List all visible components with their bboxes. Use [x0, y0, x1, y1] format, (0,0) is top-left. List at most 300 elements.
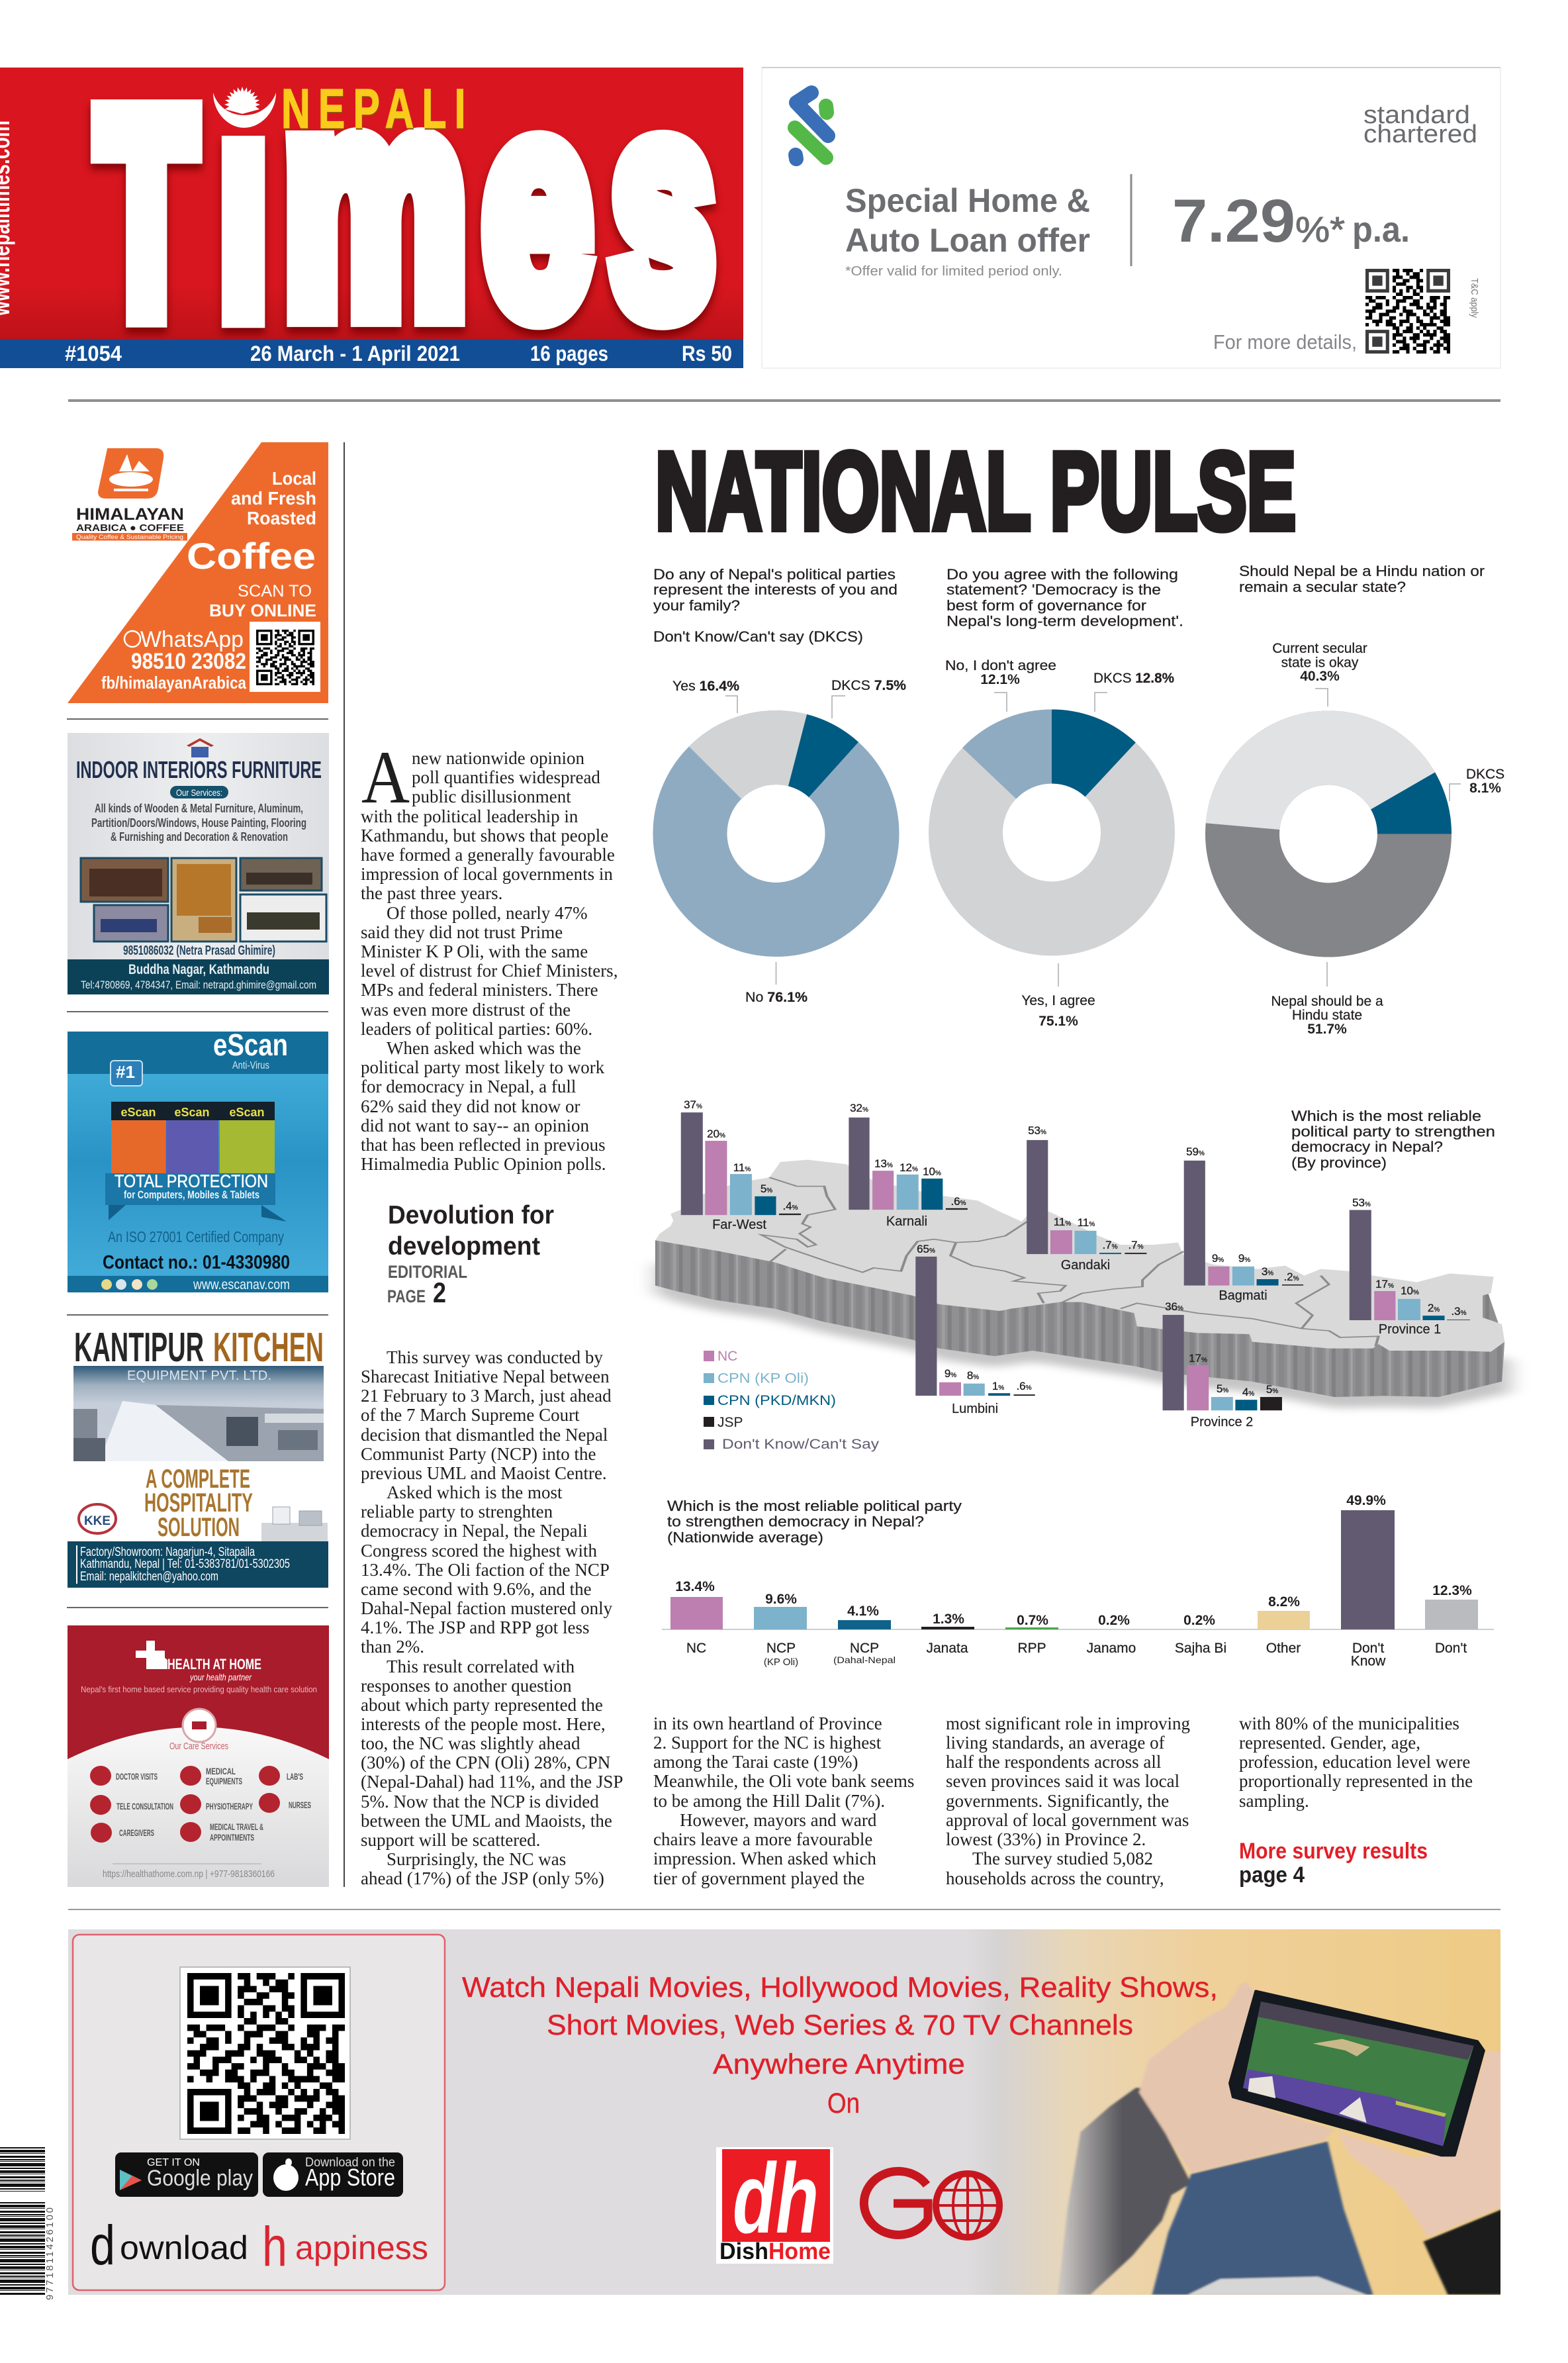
panel: nationwide bar chart	[662, 1493, 1494, 1668]
slogan: HOSPITALITY	[144, 1488, 253, 1518]
article: survey text column 2: However, mayors and ward	[680, 1810, 877, 1830]
labels: Yes 16.4%	[672, 679, 739, 694]
article: survey text column 1: (30%) of the CPN (Oli) 28%, CPN	[361, 1753, 610, 1772]
Bagmati bars: .2%	[1283, 1271, 1299, 1283]
logo word: Nepali: NEPALI	[281, 77, 474, 140]
address band: Buddha Nagar, Kathmandu	[128, 962, 269, 977]
article: intro text: level of distrust for Chief Ministers,	[361, 961, 618, 981]
article: survey text column 3: The survey studied 5,082	[972, 1849, 1153, 1868]
question: (Nationwide average)	[667, 1529, 823, 1545]
App Store badge	[263, 2152, 403, 2197]
Gandaki bars: 11%	[1054, 1216, 1071, 1228]
article: survey text column 1: (Nepal-Dahal) had 11%, and the JSP	[361, 1772, 623, 1792]
services text: Partition/Doors/Windows, House Painting, Flooring	[91, 816, 306, 830]
article: survey text column 1: 13.4%. The Oli faction of the NCP	[361, 1560, 610, 1580]
ad: Himalayan Arabica Coffee: Quality Coffee & Sustainable Pricing	[76, 534, 183, 540]
article: survey text column 1	[361, 1347, 623, 1888]
interest rate: p.a.	[1352, 210, 1410, 250]
banner: TOTAL PROTECTION	[115, 1171, 268, 1191]
article: intro text: did not want to say-- an opinion	[361, 1116, 589, 1135]
value labels: 0.2%	[1183, 1613, 1215, 1628]
slogan	[144, 1465, 253, 1542]
contact band: Kathmandu, Nepal | Tel: 01-5383781/01-5302305	[80, 1557, 290, 1571]
ad: Indoor Interiors Furniture: INDOOR INTERIORS FURNITURE	[76, 756, 322, 783]
Karnali bars: 10%	[923, 1165, 941, 1178]
service items: PHYSIOTHERAPY	[206, 1801, 253, 1811]
party names: RPP	[1017, 1641, 1046, 1656]
article: survey text column 1: This survey was conducted by	[387, 1347, 603, 1367]
logo word: Times: m	[284, 32, 467, 375]
article: intro text: MPs and federal ministers. There	[361, 980, 598, 1000]
Karnali bars	[849, 1102, 968, 1229]
question: Nepal's long-term development'.	[946, 613, 1183, 629]
Far-West bars: 5%	[761, 1182, 772, 1195]
article: survey text column 2: to be among the Hill Dalit (7%).	[653, 1791, 885, 1811]
article: survey text column 4	[1239, 1713, 1473, 1811]
legend: JSP	[717, 1415, 743, 1430]
question: Which is the most reliable	[1291, 1108, 1481, 1124]
App Store badge: Download on the	[305, 2156, 395, 2170]
question	[946, 566, 1183, 629]
question: Should Nepal be a Hindu nation or	[1239, 563, 1485, 579]
Province 1 bars: 17%	[1375, 1278, 1394, 1290]
article: survey text column 2	[653, 1713, 914, 1888]
issue strip: Rs 50	[682, 342, 732, 365]
article: intro text: impression of local governments in	[361, 864, 613, 884]
article: intro text: the past three years.	[361, 883, 502, 903]
donut chart	[689, 710, 862, 920]
question: to strengthen democracy in Nepal?	[667, 1514, 924, 1529]
ad: Health at Home: Our Care Services	[169, 1741, 228, 1752]
slogan	[187, 468, 316, 577]
question: your family?	[653, 597, 740, 614]
legend: NC	[717, 1349, 737, 1364]
Far-West bars: 37%	[684, 1098, 702, 1111]
Google Play badge: Google play	[147, 2166, 253, 2191]
QR code	[250, 622, 320, 692]
ad: Health at Home: https://healthathome.com.np | +977-9818360166	[103, 1868, 275, 1880]
issue strip: #1054	[65, 342, 122, 365]
service items: MEDICAL TRAVEL &	[210, 1821, 263, 1832]
KKE logo: KKE	[84, 1514, 111, 1528]
ad: Health at Home	[68, 1625, 329, 1887]
ad: Health at Home: HEALTH AT HOME	[167, 1656, 261, 1672]
Lumbini bars	[915, 1243, 1035, 1416]
Far-West bars	[681, 1098, 801, 1232]
ad: Indoor Interiors Furniture	[68, 733, 329, 994]
icon: coffee logo	[99, 449, 163, 498]
donut chart	[1211, 716, 1446, 951]
article: intro text: Kathmandu, but shows that people	[361, 826, 608, 845]
service items: APPOINTMENTS	[210, 1832, 254, 1843]
slogan: download happiness: h	[262, 2215, 287, 2278]
article: survey text column 3: lowest (33%) in Province 2.	[946, 1829, 1146, 1849]
slogan: Local	[272, 468, 316, 489]
slogan: download happiness	[90, 2214, 428, 2278]
Province 1 bars: .3%	[1451, 1305, 1467, 1318]
question: remain a secular state?	[1239, 579, 1406, 595]
article: intro text	[361, 736, 618, 1174]
article: intro text: with the political leadership in	[361, 806, 578, 826]
labels: No, I don't agree	[945, 658, 1056, 673]
interest rate	[1172, 187, 1410, 255]
contact band: Factory/Showroom: Nagarjun-4, Sitapaila	[80, 1545, 255, 1559]
article: survey text column 1: reliable party to strenghten	[361, 1502, 553, 1521]
ad: Kantipur Kitchen	[68, 1325, 328, 1588]
teaser: editorial: development	[388, 1232, 540, 1261]
logo word: Times: T	[98, 54, 195, 371]
question: Do you agree with the following	[946, 566, 1178, 583]
Province 1 bars: 2%	[1428, 1302, 1440, 1314]
Bagmati bars: Bagmati	[1219, 1288, 1268, 1303]
Karnali bars: Karnali	[886, 1214, 927, 1229]
labels: DKCS 7.5%	[831, 678, 906, 693]
badge: #1	[116, 1062, 135, 1082]
appliances	[261, 1507, 328, 1543]
ad: Health at Home: your health partner	[189, 1672, 252, 1682]
labels: 12.1%	[980, 672, 1020, 687]
labels: Current secular	[1272, 641, 1367, 656]
ad: Himalayan Arabica Coffee: SCAN TO	[238, 582, 312, 601]
map of Nepal	[655, 1160, 1510, 1408]
question: democracy in Nepal?	[1291, 1139, 1443, 1155]
contact	[101, 627, 246, 693]
headline: Watch Nepali Movies, Hollywood Movies, Reality Shows,	[462, 1972, 1218, 2003]
Province 2 bars: 36%	[1165, 1300, 1183, 1313]
donut chart	[930, 711, 1174, 954]
Bagmati bars: 3%	[1262, 1265, 1273, 1278]
service items: EQUIPMENTS	[206, 1776, 242, 1786]
icon: bank logo ribbon	[795, 93, 828, 159]
value labels: 49.9%	[1346, 1493, 1386, 1508]
Far-West bars: .4%	[782, 1200, 798, 1212]
article: survey text column 3: approval of local government was	[946, 1810, 1189, 1830]
party names: NCP	[766, 1641, 796, 1656]
article: intro text: leaders of political parties: 60%.	[361, 1019, 592, 1039]
slogan: SOLUTION	[158, 1513, 240, 1542]
service items: TELE CONSULTATION	[116, 1801, 173, 1811]
Karnali bars: .6%	[950, 1195, 966, 1208]
question	[653, 566, 898, 645]
Gandaki bars: .7%	[1128, 1239, 1144, 1251]
labels: Nepal should be a	[1271, 994, 1383, 1009]
service items	[90, 1766, 311, 1843]
panel: download app	[73, 1935, 445, 2290]
Bagmati bars	[1184, 1145, 1303, 1303]
Lumbini bars: 65%	[917, 1243, 935, 1255]
Google Play badge	[115, 2152, 258, 2197]
article: intro text: Himalmedia Public Opinion polls.	[361, 1154, 606, 1174]
offer heading: Special Home &	[845, 182, 1090, 219]
offer heading: Auto Loan offer	[845, 222, 1090, 259]
party names: Janamo	[1087, 1641, 1136, 1656]
ad: eScan Anti-Virus: Anti-Virus	[232, 1060, 269, 1071]
labels: 51.7%	[1307, 1022, 1347, 1037]
value labels: 13.4%	[675, 1579, 715, 1594]
article: survey text column 1: too, the NC was slightly ahead	[361, 1733, 580, 1753]
article: survey text column 1: democracy in Nepal, the Nepali	[361, 1521, 588, 1541]
address band: Tel:4780869, 4784347, Email: netrapd.ghimire@gmail.com	[81, 979, 316, 991]
article: intro text: When asked which was the	[387, 1038, 581, 1058]
kitchen photo	[73, 1366, 324, 1461]
article: survey text column 1: Surprisingly, the NC was	[387, 1849, 566, 1869]
value labels: 1.3%	[933, 1612, 964, 1627]
article: intro text: political party most likely to work	[361, 1057, 605, 1077]
barcode: 9771811426100	[44, 2207, 56, 2300]
labels	[672, 678, 906, 1005]
Lumbini bars: Lumbini	[952, 1402, 998, 1416]
Province 2 bars	[1163, 1300, 1282, 1429]
question: Which is the most reliable political party	[667, 1498, 962, 1514]
legend: Don't Know/Can't Say	[722, 1437, 880, 1452]
emblem	[183, 1709, 216, 1742]
article: intro text: poll quantifies widespread	[412, 767, 600, 787]
labels: 75.1%	[1038, 1014, 1078, 1029]
teaser: editorial: Devolution for	[388, 1201, 554, 1230]
headline: Short Movies, Web Series & 70 TV Channels	[547, 2009, 1133, 2041]
footer band: www.escanav.com	[193, 1277, 290, 1292]
ad: eScan Anti-Virus	[68, 1028, 328, 1292]
headline	[462, 1972, 1218, 2119]
article: survey text column 1: Dahal-Nepal faction mustered only	[361, 1598, 613, 1618]
Gandaki bars	[1027, 1124, 1146, 1273]
Province 1 bars: Province 1	[1379, 1322, 1441, 1337]
ad: Standard Chartered	[762, 68, 1500, 368]
article: survey text column 1: previous UML and Maoist Centre.	[361, 1463, 607, 1483]
article: survey text column 3: half the respondents across all	[946, 1752, 1161, 1772]
services pill: Our Services:	[176, 787, 222, 798]
DishHome logo	[716, 2143, 833, 2264]
services text: & Furnishing and Decoration & Renovation	[111, 830, 288, 844]
question: (By province)	[1291, 1155, 1387, 1171]
article: survey text column 2: among the Tarai caste (19%)	[653, 1752, 858, 1772]
labels	[945, 658, 1174, 1029]
photo: hands holding phone	[1058, 1982, 1502, 2295]
service items: DOCTOR VISITS	[116, 1771, 158, 1782]
service items: NURSES	[289, 1800, 311, 1810]
slogan: Roasted	[247, 508, 316, 528]
article: survey text column 1: 4.1%. The JSP and RPP got less	[361, 1617, 590, 1637]
question: statement? 'Democracy is the	[946, 581, 1161, 598]
article: intro text: Of those polled, nearly 47%	[387, 903, 588, 923]
Province 2 bars: 17%	[1189, 1352, 1207, 1365]
contact: fb/himalayanArabica	[101, 673, 246, 693]
Province 1 bars	[1350, 1196, 1470, 1337]
article: survey text column 1: 5%. Now that the NCP is divided	[361, 1792, 599, 1811]
contact: 98510 23082	[131, 649, 246, 674]
article: survey text column 4: sampling.	[1239, 1791, 1309, 1811]
value labels: 0.2%	[1098, 1613, 1130, 1628]
Far-West bars: 11%	[733, 1161, 751, 1174]
Bagmati bars: 9%	[1238, 1252, 1250, 1265]
article: survey text column 4: with 80% of the municipalities	[1239, 1713, 1459, 1733]
party names: Janata	[926, 1641, 968, 1656]
Gandaki bars: 11%	[1078, 1216, 1095, 1229]
ad: Himalayan Arabica Coffee	[68, 442, 328, 703]
services text	[91, 802, 306, 844]
interest rate: %*	[1295, 210, 1345, 250]
teaser: more survey results: More survey results	[1239, 1839, 1428, 1864]
Province 2 bars: 5%	[1266, 1383, 1278, 1396]
App Store badge: App Store	[305, 2164, 395, 2191]
labels	[1271, 641, 1504, 1037]
article: survey text column 4: represented. Gender, age,	[1239, 1733, 1420, 1753]
labels: 8.1%	[1469, 781, 1501, 796]
service items: MEDICAL	[206, 1766, 236, 1776]
party names: Other	[1266, 1641, 1301, 1656]
Google Play badge: GET IT ON	[147, 2157, 200, 2168]
Bagmati bars: 9%	[1212, 1252, 1224, 1265]
article: survey text column 2: tier of government played the	[653, 1868, 864, 1888]
ad: Indoor Interiors Furniture: 9851086032 (Netra Prasad Ghimire)	[123, 943, 275, 958]
ad: Kantipur Kitchen: KANTIPUR	[74, 1325, 204, 1371]
article: survey text column 1: Sharecast Initiative Nepal between	[361, 1367, 610, 1386]
article: survey text column 1: came second with 9.6%, and the	[361, 1579, 592, 1599]
bars	[670, 1510, 1478, 1629]
article: survey text column 4: proportionally represented in the	[1239, 1771, 1473, 1791]
bank name: standard	[1363, 101, 1470, 129]
contact: WhatsApp	[140, 627, 244, 652]
ad: Kantipur Kitchen: KITCHEN	[213, 1325, 324, 1371]
article: survey text column 1: decision that dismantled the Nepal	[361, 1425, 608, 1445]
slogan: download happiness: appiness	[295, 2229, 428, 2266]
article: survey text column 1: about which party represented the	[361, 1695, 603, 1715]
masthead: Nepali Times	[0, 68, 743, 368]
article: survey text column 1: of the 7 March Supreme Court	[361, 1405, 580, 1425]
slogan: A COMPLETE	[146, 1465, 250, 1494]
legend: CPN (KP Oli)	[717, 1371, 809, 1386]
Lumbini bars: 8%	[967, 1369, 979, 1382]
party names: Don't	[1352, 1641, 1384, 1656]
icon: roof	[187, 738, 214, 757]
article: intro text: public disillusionment	[412, 787, 571, 806]
teaser: editorial: 2	[433, 1277, 446, 1309]
furniture photos	[81, 858, 326, 941]
value labels: 12.3%	[1432, 1583, 1472, 1598]
banner	[105, 1171, 287, 1222]
party names: Know	[1351, 1654, 1386, 1668]
article: survey text column 3: seven provinces said it was local	[946, 1771, 1179, 1791]
Karnali bars: 12%	[899, 1161, 918, 1174]
article: survey text column 3: living standards, an average of	[946, 1733, 1165, 1753]
labels: state is okay	[1281, 655, 1359, 670]
article: survey text column 2: Meanwhile, the Oli vote bank seems	[653, 1771, 914, 1791]
offer heading: *Offer valid for limited period only.	[845, 264, 1062, 279]
ad: Himalayan Arabica Coffee: ARABICA ● COFFEE	[76, 522, 184, 534]
product boxes: eScan	[229, 1106, 265, 1119]
logo word: Times: i	[220, 33, 267, 375]
article: survey text column 2: in its own heartland of Province	[653, 1713, 882, 1733]
article: survey text column 1: This result correlated with	[387, 1657, 575, 1676]
panel: donut democracy	[930, 566, 1183, 1029]
teaser: editorial: EDITORIAL	[388, 1262, 467, 1282]
article: survey text column 3: governments. Significantly, the	[946, 1791, 1169, 1811]
headline: On	[827, 2088, 860, 2119]
panel: donut political parties	[653, 566, 906, 1005]
more details with QR code	[1213, 269, 1480, 354]
Province 1 bars: 10%	[1401, 1284, 1419, 1297]
article: survey text column 4: profession, education level were	[1239, 1752, 1470, 1772]
labels: Yes, I agree	[1021, 993, 1095, 1008]
services text: All kinds of Wooden & Metal Furniture, Aluminum,	[95, 802, 303, 815]
Lumbini bars: 1%	[992, 1380, 1004, 1392]
panel: province map chart	[655, 1098, 1510, 1452]
labels: Hindu state	[1292, 1008, 1362, 1023]
Karnali bars: 13%	[874, 1157, 893, 1170]
Gandaki bars: Gandaki	[1061, 1258, 1110, 1273]
logo emblem: sun and crescent	[213, 87, 276, 128]
value labels: 4.1%	[847, 1604, 879, 1619]
Far-West bars: Far-West	[712, 1218, 766, 1232]
labels: DKCS	[1466, 767, 1504, 782]
slogan: download happiness: d	[90, 2214, 115, 2276]
kitchen photo: EQUIPMENT PVT. LTD.	[127, 1369, 271, 1383]
labels: DKCS 12.8%	[1093, 671, 1174, 686]
legend: CPN (PKD/MKN)	[717, 1393, 836, 1408]
Karnali bars: 32%	[850, 1102, 868, 1114]
slogan: download happiness: ownload	[120, 2229, 248, 2266]
legend	[704, 1349, 880, 1452]
article: survey text column 1: responses to another question	[361, 1676, 572, 1696]
logo word: Times: e	[483, 34, 592, 377]
Province 2 bars: Province 2	[1191, 1415, 1253, 1429]
logo word: Times: s	[611, 34, 714, 377]
QR code	[180, 1967, 350, 2139]
headline: Anywhere Anytime	[713, 2049, 965, 2080]
article: survey text column 1: between the UML and Maoists, the	[361, 1811, 612, 1831]
logo word: Times	[85, 99, 721, 339]
ad: Himalayan Arabica Coffee: BUY ONLINE	[209, 601, 316, 620]
Province 2 bars: 4%	[1242, 1386, 1254, 1398]
contact band: Email: nepalkitchen@yahoo.com	[80, 1570, 218, 1584]
issue strip: 26 March - 1 April 2021	[250, 342, 460, 365]
article: intro text: was even more distrust of the	[361, 1000, 571, 1020]
party names: Sajha Bi	[1175, 1641, 1226, 1656]
icon: cross house	[136, 1641, 167, 1669]
Province 1 bars: 53%	[1352, 1196, 1371, 1209]
article: intro text: Minister K P Oli, with the same	[361, 941, 588, 961]
product boxes: eScan	[120, 1106, 156, 1119]
party names: (KP Oli)	[764, 1657, 798, 1668]
article: intro text: have formed a generally favourable	[361, 845, 615, 865]
article: survey text column 1: 21 February to 3 March, just ahead	[361, 1386, 612, 1406]
Lumbini bars: 9%	[945, 1367, 956, 1380]
value labels: 8.2%	[1268, 1594, 1300, 1610]
teaser: editorial: PAGE	[387, 1286, 426, 1306]
DishHome logo: Dish	[719, 2239, 768, 2264]
service items: CAREGIVERS	[119, 1827, 154, 1838]
issue strip	[0, 339, 743, 368]
ad: eScan Anti-Virus: Contact no.: 01-4330980	[103, 1252, 290, 1273]
article: intro text: said they did not trust Prime	[361, 922, 563, 942]
ad: Himalayan Arabica Coffee: HIMALAYAN	[76, 505, 184, 524]
Far-West bars: 20%	[707, 1128, 725, 1140]
article: survey text column 1: interests of the people most. Here,	[361, 1714, 606, 1734]
badge	[111, 1061, 142, 1086]
contact band	[68, 1541, 328, 1588]
article: survey text column 1: ahead (17%) of the JSP (only 5%)	[361, 1868, 604, 1888]
article: survey text column 1: than 2%.	[361, 1637, 424, 1657]
question: represent the interests of you and	[653, 581, 898, 598]
labels: 40.3%	[1300, 669, 1340, 684]
more details with QR code: For more details,	[1213, 330, 1357, 354]
slogan: Coffee	[187, 535, 316, 577]
banner: for Computers, Mobiles & Tablets	[124, 1188, 259, 1201]
article: survey text column 2: impression. When asked which	[653, 1849, 876, 1868]
teaser: editorial	[387, 1201, 554, 1309]
article: survey text column 1: Asked which is the most	[387, 1482, 563, 1502]
article: intro text: 62% said they did not know or	[361, 1096, 580, 1116]
